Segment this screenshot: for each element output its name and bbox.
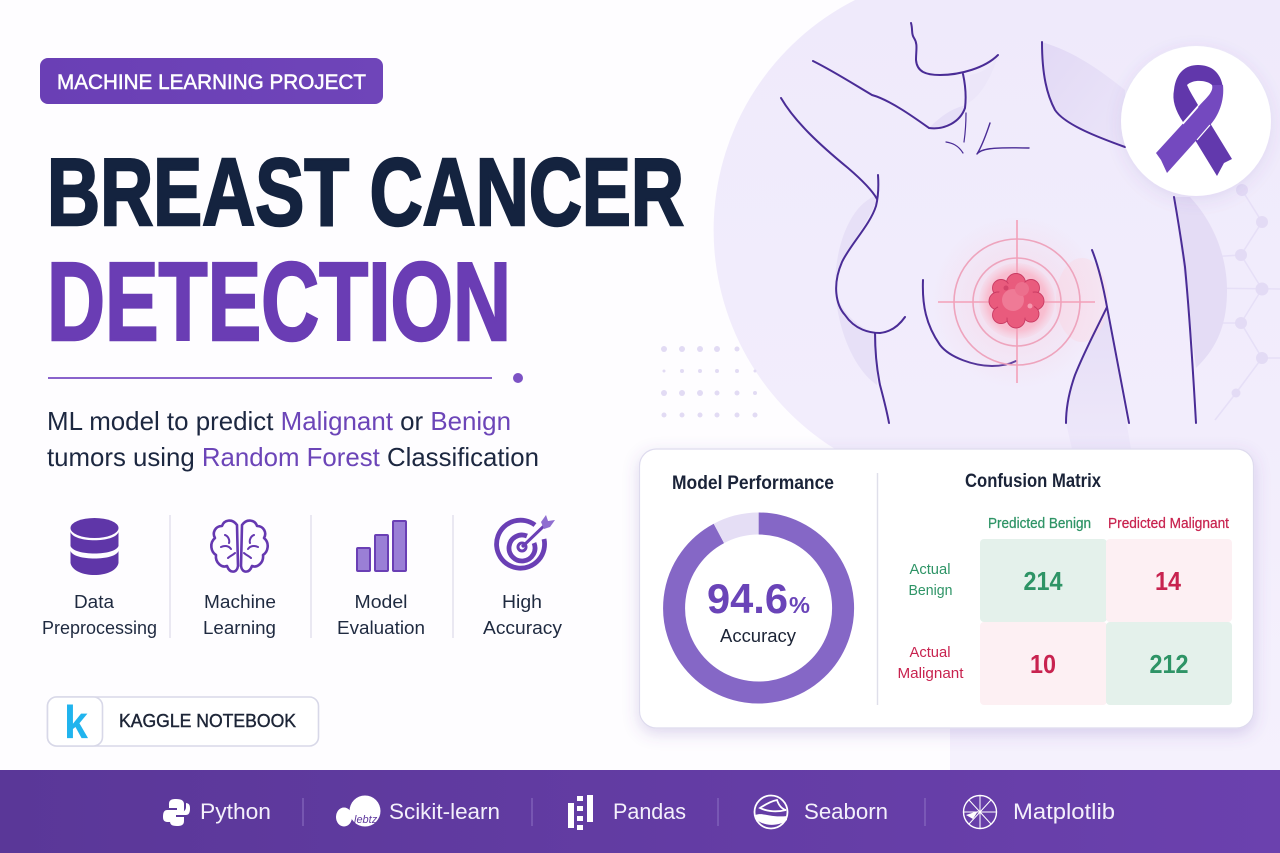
icon: scikit-learn bbox=[336, 796, 380, 826]
panel: confusion matrix: Predicted Benign bbox=[988, 516, 1091, 532]
feature labels: High bbox=[502, 591, 542, 612]
subtitle bbox=[47, 406, 539, 472]
feature labels bbox=[42, 591, 563, 638]
matrix values: 10 bbox=[1030, 649, 1056, 679]
separators bbox=[170, 515, 453, 638]
matrix values: 214 bbox=[1024, 566, 1063, 596]
badge: machine learning project: MACHINE LEARNING PROJECT bbox=[57, 70, 366, 94]
kaggle notebook button: KAGGLE NOTEBOOK bbox=[119, 711, 296, 731]
molecule network bbox=[1196, 184, 1280, 420]
matrix values bbox=[1024, 566, 1188, 679]
footer: tech stack bbox=[0, 770, 1280, 853]
title: DETECTION bbox=[47, 240, 511, 364]
panel: model performance: Model Performance bbox=[672, 473, 834, 494]
tumor cluster bbox=[989, 274, 1044, 328]
panel: model performance: Accuracy bbox=[720, 626, 796, 646]
awareness ribbon badge bbox=[1121, 46, 1271, 196]
feature labels: Evaluation bbox=[337, 617, 425, 638]
panel: confusion matrix: Actual bbox=[910, 644, 950, 661]
icon: target with arrow bbox=[497, 515, 555, 568]
footer: tech stack: Scikit-learn bbox=[389, 799, 500, 824]
matrix values: 212 bbox=[1150, 649, 1188, 679]
icon: matplotlib bbox=[964, 796, 996, 828]
panel: confusion matrix: Actual bbox=[910, 561, 950, 578]
icon: brain bbox=[211, 521, 268, 572]
matrix cells bbox=[980, 539, 1232, 705]
feature labels: Preprocessing bbox=[42, 617, 157, 638]
icon: bar chart bbox=[357, 521, 406, 571]
icon: python bbox=[163, 799, 190, 826]
panel: confusion matrix bbox=[898, 471, 1232, 705]
panel: model performance: 94.6 bbox=[707, 575, 788, 622]
panel: confusion matrix: Confusion Matrix bbox=[965, 471, 1101, 492]
footer: tech stack: Seaborn bbox=[804, 799, 888, 824]
feature labels: Data bbox=[74, 591, 115, 612]
donut chart bbox=[674, 523, 843, 692]
body lines bbox=[781, 23, 1196, 423]
body shading bbox=[835, 42, 1227, 449]
footer: tech stack: Pandas bbox=[613, 799, 686, 824]
panel: confusion matrix: Malignant bbox=[898, 665, 964, 682]
footer: tech stack: Python bbox=[200, 799, 271, 824]
subtitle: tumors using Random Forest Classification bbox=[47, 442, 539, 472]
kaggle notebook button bbox=[48, 696, 318, 748]
divider with dot bbox=[48, 373, 523, 383]
illustration: torso outline with tumor target bbox=[781, 23, 1227, 449]
panel: model performance: % bbox=[789, 592, 810, 618]
matrix values: 14 bbox=[1155, 566, 1181, 596]
icon: database bbox=[70, 518, 118, 575]
features row bbox=[42, 515, 563, 638]
tumor glow bbox=[1056, 258, 1108, 342]
badge: machine learning project bbox=[40, 58, 383, 104]
title: BREAST CANCER bbox=[47, 139, 684, 246]
kaggle notebook button: k bbox=[64, 696, 88, 748]
panel: model performance bbox=[672, 473, 843, 692]
background: pale lavender shape bbox=[714, 0, 1280, 770]
tumor target bbox=[932, 217, 1102, 387]
icon: pandas bbox=[568, 795, 593, 830]
panel: confusion matrix: Predicted Malignant bbox=[1108, 516, 1229, 532]
icon: seaborn bbox=[754, 796, 788, 828]
feature labels: Model bbox=[354, 591, 408, 612]
dot pattern bbox=[661, 346, 758, 418]
subtitle: ML model to predict Malignant or Benign bbox=[47, 406, 511, 436]
feature labels: Machine bbox=[204, 591, 276, 612]
results card bbox=[640, 449, 1254, 728]
panel: confusion matrix: Benign bbox=[908, 582, 952, 599]
feature labels: Learning bbox=[203, 617, 276, 638]
title bbox=[47, 139, 684, 364]
feature labels: Accuracy bbox=[483, 617, 563, 638]
icon: purple ribbon bbox=[1156, 65, 1232, 176]
footer: tech stack: Matplotlib bbox=[1013, 799, 1115, 824]
icon: scikit-learn: lebtz bbox=[354, 814, 378, 826]
